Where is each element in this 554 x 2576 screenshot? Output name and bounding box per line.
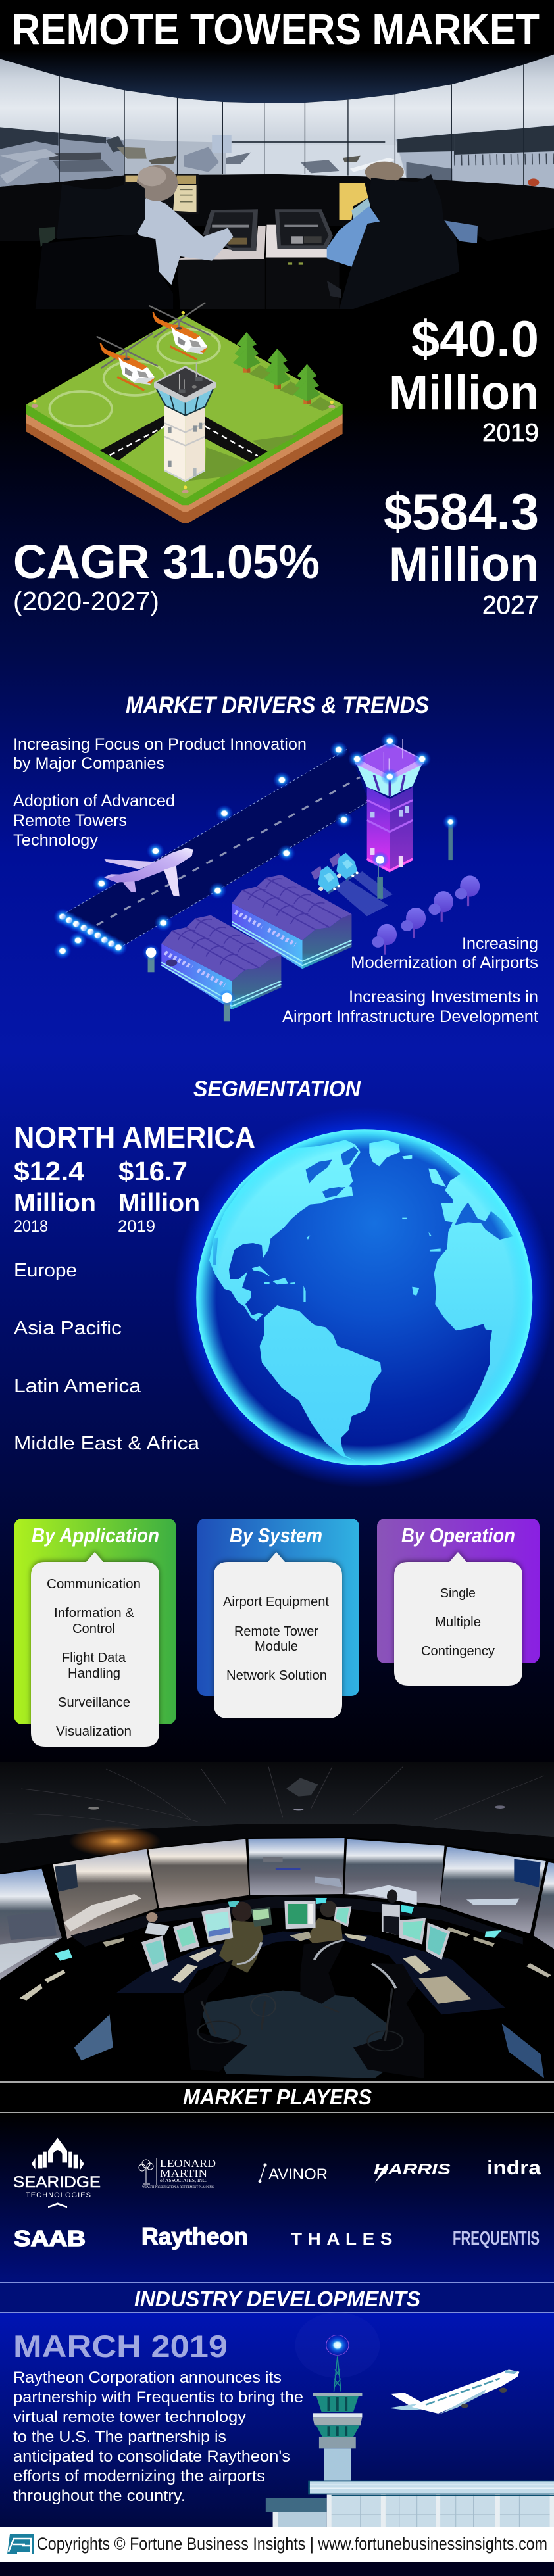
icon: helicopter left: [97, 333, 158, 390]
development text: virtual remote tower technology: [13, 2408, 246, 2426]
development text: [13, 2369, 303, 2505]
driver text: product innovation: Increasing Focus on Product Innovation: [13, 735, 307, 754]
list card: Module: [255, 1640, 298, 1654]
heading: MARKET PLAYERS: [183, 2085, 372, 2109]
icon: lamp post far right: [443, 814, 458, 860]
stat: CAGR: [13, 536, 320, 616]
illustration: isometric airfield with control tower: [26, 303, 343, 523]
panel: by operation: [377, 1519, 540, 1686]
list card: [31, 1552, 159, 1747]
stat: CAGR: CAGR 31.05%: [13, 536, 320, 589]
photo: remote tower control room: [0, 51, 554, 309]
logo: Leonard Martin: [139, 2157, 216, 2189]
list card: Visualization: [56, 1724, 132, 1739]
logo: Harris: [374, 2160, 451, 2183]
region: Latin America: Latin America: [14, 1376, 141, 1397]
stat: 2027 market value: Million: [389, 538, 539, 591]
driver text: infrastructure investment: Increasing Investments in: [349, 988, 538, 1006]
operator left: [36, 165, 233, 309]
logo: Searidge: TECHNOLOGIES: [26, 2191, 91, 2199]
heading: By Application: [32, 1524, 159, 1547]
logo: Fortune Business Insights: [7, 2534, 34, 2554]
logo: Leonard Martin: MARTIN: [160, 2167, 207, 2179]
driver text: advanced technology: Adoption of Advanced: [13, 792, 175, 810]
logo: Harris: HARRIS: [374, 2160, 451, 2177]
icon: purple control tower: [348, 733, 431, 873]
icon: airplane: [104, 848, 193, 896]
region list: North America: $16.7: [118, 1156, 188, 1186]
footer: [0, 2527, 554, 2576]
development text: throughout the country.: [13, 2487, 186, 2505]
region list: North America: Million: [14, 1189, 96, 1217]
list card: Remote Tower: [234, 1624, 318, 1639]
globe: [174, 1107, 554, 1488]
stat: 2019 market value: $40.0: [411, 310, 539, 368]
region list: North America: Million: [118, 1189, 200, 1217]
stat: 2019 market value: 2019: [482, 419, 539, 447]
driver text: product innovation: [13, 735, 307, 773]
development text: anticipated to consolidate Raytheon's: [13, 2448, 290, 2466]
heading: MARKET DRIVERS & TRENDS: [126, 693, 429, 718]
stat: 2027 market value: 2027: [482, 591, 539, 620]
list card: Information &: [54, 1606, 135, 1620]
list card: Multiple: [435, 1615, 481, 1630]
desk and touch screens: [176, 209, 340, 309]
list card: [214, 1552, 342, 1718]
icon: lamp post left: [142, 944, 160, 972]
heading: By System: [230, 1524, 322, 1547]
list card: Handling: [68, 1666, 120, 1681]
region: Europe: Europe: [14, 1260, 77, 1281]
panel: market drivers and trends: [13, 693, 538, 1026]
stat: 2019 market value: Million: [389, 366, 539, 420]
panel: by application: [14, 1519, 176, 1747]
logo: Searidge: [13, 2138, 101, 2208]
panel: hero: [0, 5, 554, 620]
icon: lamp post front: [218, 990, 236, 1021]
icon: service vehicles: [311, 853, 393, 916]
region list: North America: 2019: [118, 1217, 155, 1236]
region: Middle East and Africa: Middle East & Africa: [14, 1433, 200, 1454]
stat: 2019 market value: [389, 310, 539, 447]
region list: North America: NORTH AMERICA: [14, 1121, 255, 1154]
driver text: modernization: Increasing: [462, 935, 538, 953]
photo: air traffic simulator room: [0, 1762, 554, 2083]
operator right: [327, 162, 459, 309]
logo: Leonard Martin: LEONARD: [160, 2157, 216, 2170]
list card: [394, 1552, 522, 1686]
region: Asia Pacific: Asia Pacific: [14, 1318, 122, 1339]
development text: to the U.S. The partnership is: [13, 2428, 226, 2446]
stat: 2027 market value: $584.3: [384, 483, 539, 541]
date heading: MARCH 2019: [13, 2329, 228, 2364]
list card: Airport Equipment: [223, 1595, 329, 1609]
driver text: advanced technology: Remote Towers: [13, 812, 127, 830]
list card: Communication: [47, 1577, 141, 1592]
illustration: isometric airport at night: [53, 733, 480, 1021]
panel: industry developments: [0, 2282, 554, 2528]
list card: Flight Data: [62, 1651, 126, 1665]
icon: trees: [372, 875, 480, 955]
heading: By Operation: [401, 1524, 515, 1547]
heading: SEGMENTATION: [193, 1077, 361, 1102]
stat: CAGR: (2020-2027): [13, 586, 159, 616]
icon: hangars: [161, 875, 351, 1009]
development text: partnership with Frequentis to bring the: [13, 2389, 303, 2406]
icon: control tower: [154, 363, 216, 481]
driver text: modernization: Modernization of Airports: [351, 954, 538, 972]
development text: Raytheon Corporation announces its: [13, 2369, 282, 2387]
list card: Contingency: [421, 1644, 495, 1659]
icon: helicopter right: [149, 303, 211, 360]
list card: Single: [440, 1586, 476, 1601]
driver text: infrastructure investment: Airport Infrastructure Development: [282, 1008, 538, 1026]
list card: Network Solution: [226, 1668, 327, 1683]
logo: Saab: SAAB: [14, 2226, 86, 2250]
panel: by system: [197, 1519, 359, 1718]
logo: Raytheon: Raytheon: [141, 2223, 248, 2250]
driver text: modernization: [351, 935, 538, 972]
page background: [0, 0, 554, 1762]
driver text: advanced technology: Technology: [13, 831, 99, 850]
heading: INDUSTRY DEVELOPMENTS: [134, 2287, 420, 2311]
panel: segmentation: [14, 1077, 554, 1488]
list card: Control: [72, 1622, 115, 1636]
region list: North America: [14, 1121, 255, 1236]
logo: Leonard Martin: of ASSOCIATES, INC.: [160, 2178, 207, 2183]
logo: Searidge: SEARIDGE: [13, 2174, 101, 2191]
driver text: advanced technology: [13, 792, 175, 850]
driver text: infrastructure investment: [282, 988, 538, 1026]
icon: lamp post near tower: [371, 852, 389, 899]
stat: 2027 market value: [384, 483, 539, 620]
logo: Indra: indra: [487, 2157, 541, 2179]
illustration: airport terminal, tower and departing aircraft: [266, 2312, 554, 2527]
development text: efforts of modernizing the airports: [13, 2467, 265, 2485]
list card: Surveillance: [58, 1695, 130, 1710]
driver text: product innovation: by Major Companies: [13, 754, 164, 773]
region list: North America: $12.4: [14, 1156, 84, 1186]
logo: Leonard Martin: WEALTH PRESERVATION & RETIREMENT PLANNING: [142, 2186, 214, 2189]
logo: Thales: THALES: [291, 2229, 398, 2248]
logo: Avinor: AVINOR: [268, 2166, 328, 2183]
panel: market players: [0, 2081, 554, 2282]
region list: North America: 2018: [14, 1217, 48, 1236]
icon: departing airplane: [389, 2369, 519, 2415]
